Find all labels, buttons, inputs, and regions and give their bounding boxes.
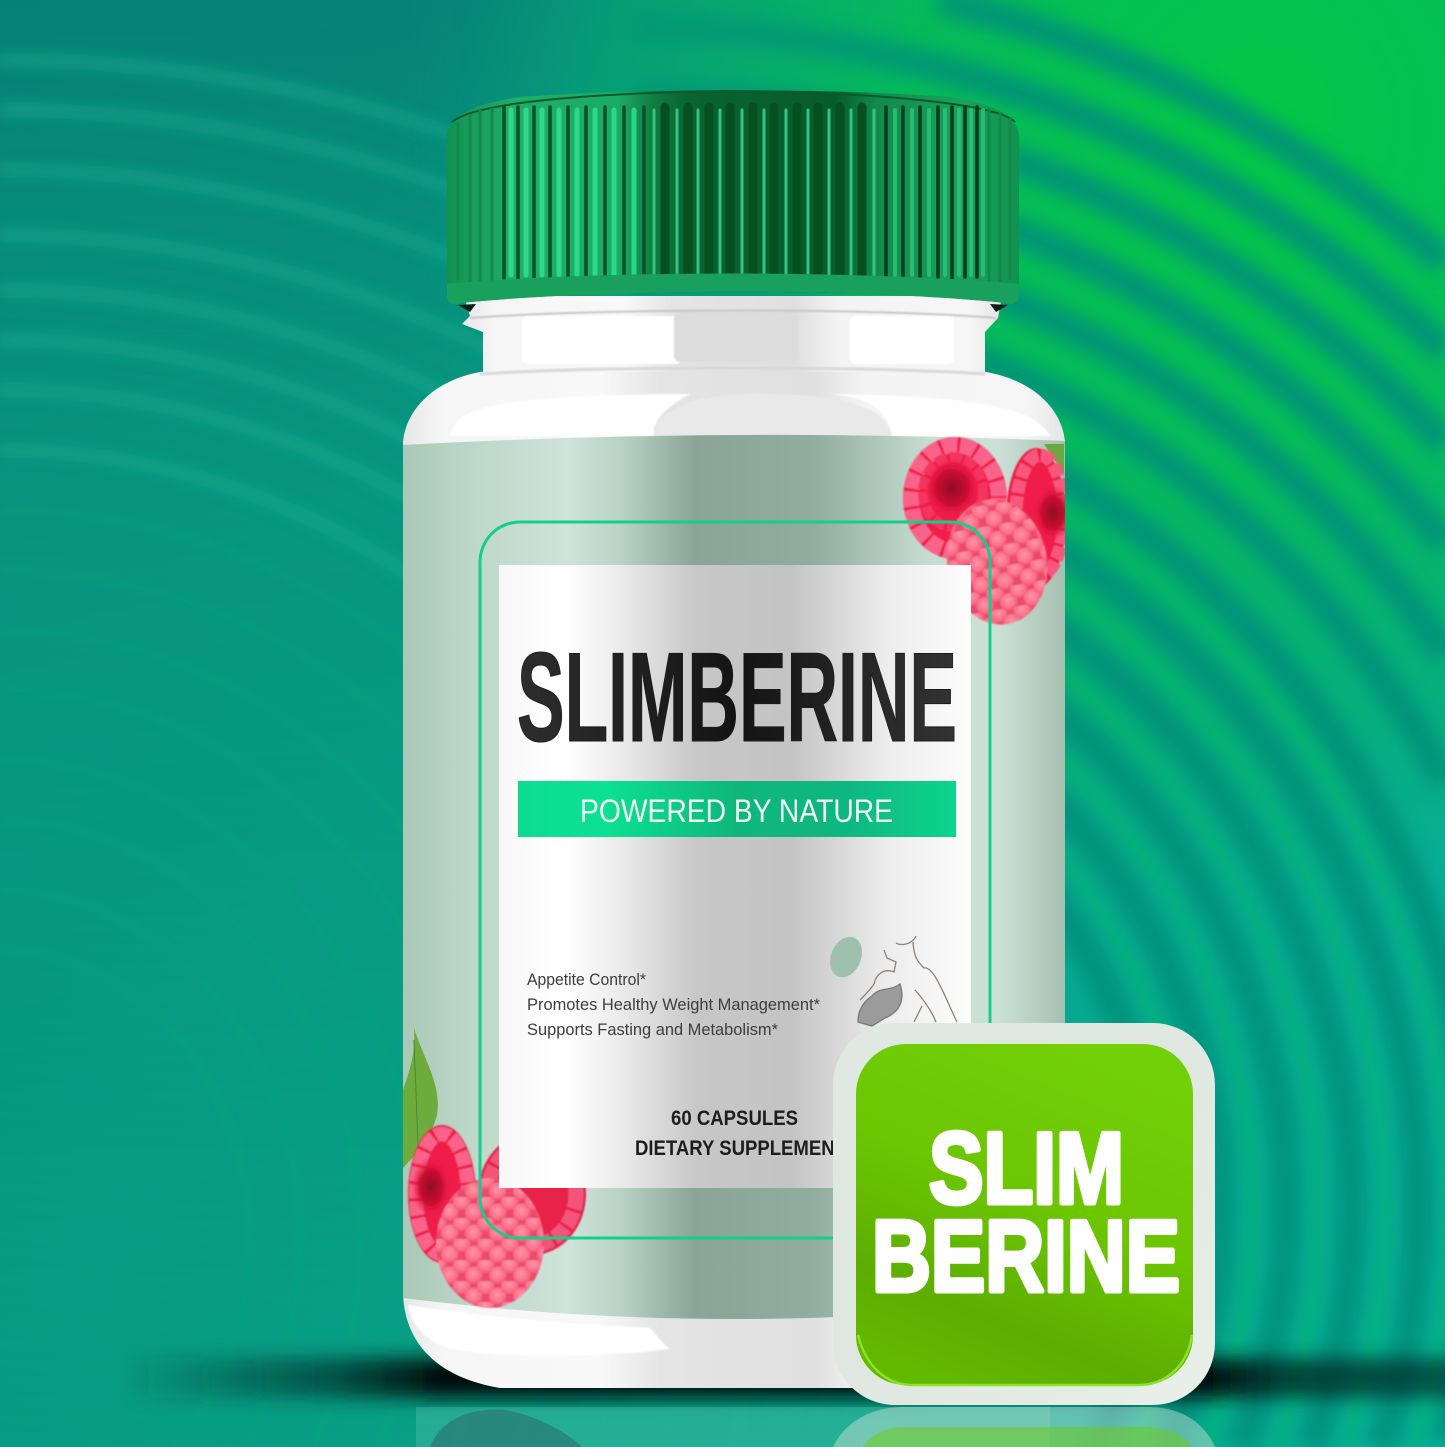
badge face <box>856 1044 1193 1385</box>
badge rim <box>833 1023 1215 1405</box>
raspberry cluster bottom left <box>403 1028 586 1308</box>
icon: woman line art <box>858 936 957 1026</box>
floor reflection <box>416 1407 1215 1447</box>
front berry <box>946 498 1048 626</box>
supplement line: DIETARY SUPPLEMENT <box>635 1137 846 1160</box>
bottle neck <box>462 296 1002 376</box>
bottle label <box>403 435 1065 1319</box>
tagline bar: POWERED BY NATURE <box>580 793 893 829</box>
leaf <box>1044 444 1064 474</box>
leaf <box>403 1028 438 1168</box>
tagline bar <box>518 781 956 837</box>
benefits list: Supports Fasting and Metabolism* <box>527 1020 778 1039</box>
badge wordmark: SLIM <box>929 1113 1124 1225</box>
benefits list: Promotes Healthy Weight Management* <box>527 995 820 1014</box>
badge wordmark <box>872 1113 1180 1313</box>
bottle <box>403 90 1073 1388</box>
floor shadow <box>120 1358 1445 1398</box>
icon: green oval <box>824 932 868 982</box>
benefits list: Appetite Control* <box>527 970 646 989</box>
front berry <box>436 1178 544 1308</box>
cap edge ribs <box>458 108 1010 284</box>
bottle highlights <box>408 310 1050 1356</box>
raspberry cluster top right <box>903 437 1073 633</box>
green label border <box>480 522 990 1238</box>
bottle cap <box>447 90 1019 312</box>
bottle body <box>403 372 1065 1388</box>
cap lower rim <box>447 274 1019 304</box>
right berry <box>1006 447 1065 586</box>
back berry <box>482 1144 587 1255</box>
capsule count: 60 CAPSULES <box>671 1107 798 1130</box>
cap lip shadows <box>458 304 1008 312</box>
badge <box>833 1023 1215 1405</box>
badge wordmark: BERINE <box>872 1201 1180 1313</box>
left berry <box>408 1125 476 1263</box>
cap right ribs <box>886 107 983 278</box>
product name: SLIMBERINE <box>517 626 957 768</box>
cap left ribs <box>504 107 644 278</box>
white label panel <box>499 565 971 1188</box>
badge face sheen <box>858 1335 1192 1385</box>
cap centre ribs <box>654 107 874 278</box>
benefits list <box>527 970 820 1039</box>
left berry <box>903 437 1007 559</box>
